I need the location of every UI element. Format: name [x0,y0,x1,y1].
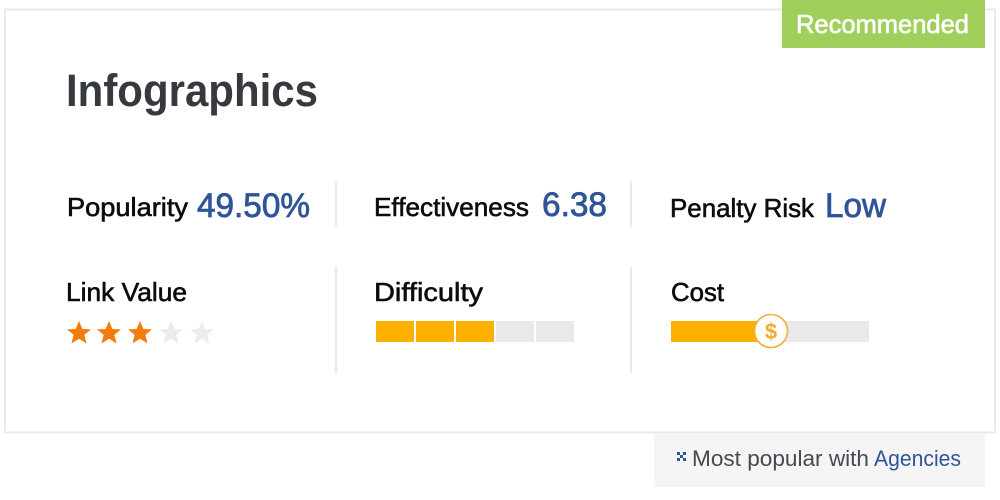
segmented bar: 3 of 5 [376,321,574,342]
icon: small cross [677,452,686,461]
metric: popularity [67,187,310,225]
metric: link value: Link Value [66,277,187,307]
metric: cost: Cost [671,277,725,307]
footer text: Most popular with [692,446,869,471]
metric: penalty risk: Low [825,187,886,225]
metric: effectiveness: Effectiveness [374,192,529,222]
cost slider bar [671,314,869,348]
badge: recommended [782,0,985,48]
metric: difficulty: Difficulty [374,277,483,307]
metric: penalty risk [670,187,886,225]
badge: recommended: Recommended [796,9,969,39]
title: Infographics [66,65,318,116]
metric: effectiveness [374,186,607,224]
star rating: 3 of 5 [67,321,214,344]
footer highlight: Agencies: Agencies [874,446,961,471]
metric: difficulty [374,277,574,342]
metric: cost [671,277,869,348]
footer: most popular with agencies [654,434,985,487]
metric: link value [66,277,214,344]
icon: dollar coin [754,314,788,348]
metric: popularity: Popularity [67,192,188,222]
metric: popularity: 49.50% [197,187,310,225]
metric: effectiveness: 6.38 [542,186,607,224]
metric: penalty risk: Penalty Risk [670,193,815,223]
icon: dollar coin: $ [765,319,777,344]
